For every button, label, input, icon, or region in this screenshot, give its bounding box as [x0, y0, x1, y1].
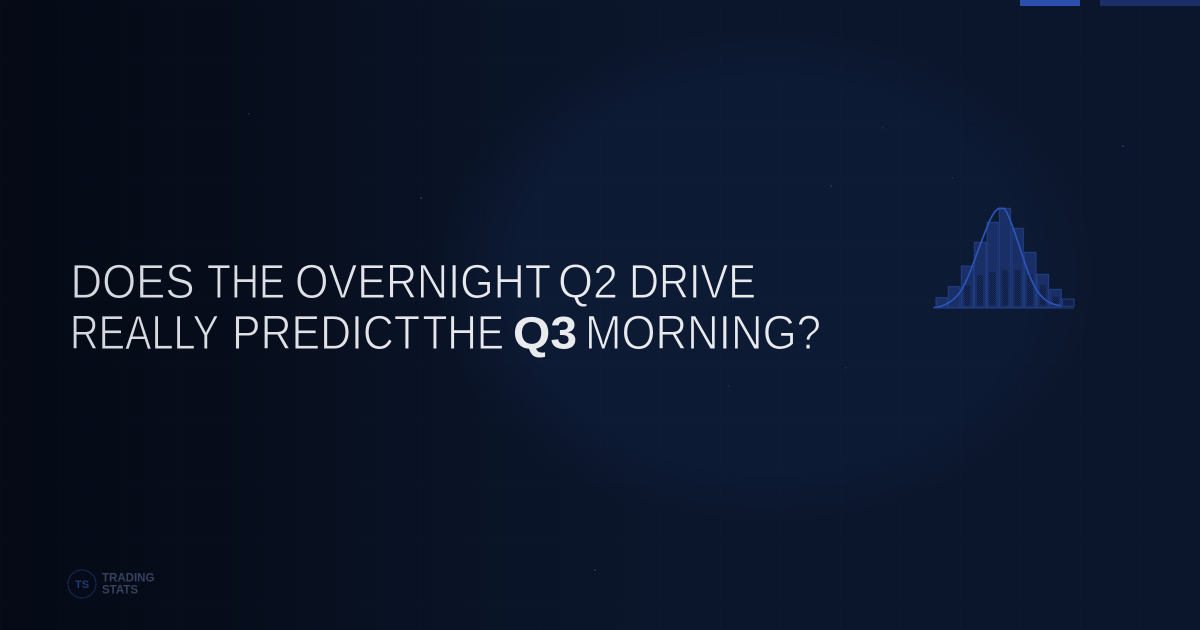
title: PREDICT	[232, 307, 420, 360]
top accent bar: muted	[1100, 0, 1200, 6]
title	[70, 256, 821, 360]
baseline	[933, 306, 1074, 309]
title: REALLY	[70, 307, 219, 360]
title: DOES	[70, 256, 194, 309]
bell curve	[933, 208, 1061, 308]
histogram bars	[936, 208, 1074, 308]
logo badge	[68, 570, 96, 598]
logo	[68, 570, 154, 598]
title: OVERNIGHT	[295, 256, 551, 309]
top accent bar: bright	[1020, 0, 1080, 6]
title: Q3	[513, 308, 577, 358]
title: Q2	[558, 256, 618, 309]
title: THE	[422, 307, 504, 360]
title: THE	[207, 256, 285, 309]
logo wordmark: STATS	[102, 584, 138, 596]
logo initials: TS	[75, 579, 89, 591]
title: DRIVE	[629, 256, 756, 309]
title: MORNING?	[585, 307, 821, 360]
histogram chart with bell curve	[933, 208, 1074, 308]
logo wordmark: TRADING	[102, 572, 154, 584]
bar dither	[964, 270, 1059, 306]
